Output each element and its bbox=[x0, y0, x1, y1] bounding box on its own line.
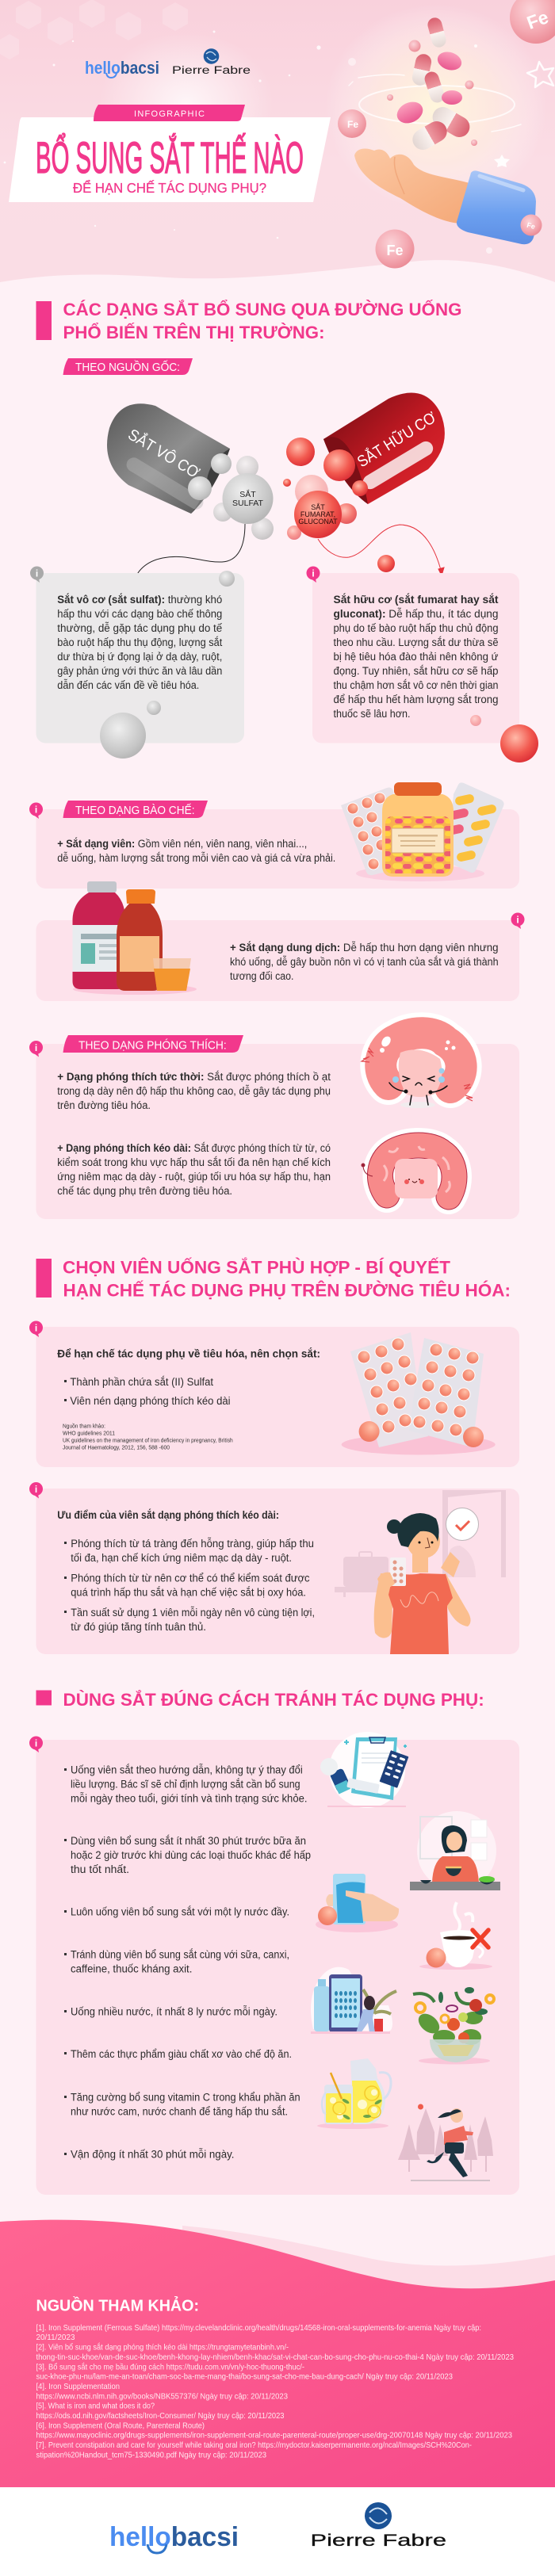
magenta bottle bbox=[73, 881, 125, 989]
logo: hellobacsi (header): hellobacsi bbox=[85, 58, 159, 78]
panel: dạng dung dịch: tương đối cao. bbox=[230, 970, 293, 982]
section heading: oral iron forms: PHỔ BIẾN TRÊN THỊ TRƯỜNG: bbox=[63, 323, 325, 342]
reference list: [3]. Bổ sung sắt cho mẹ bầu đúng cách https://tudu.com.vn/vn/y-hoc-thuong-thuc/- bbox=[36, 2362, 304, 2372]
panel: dạng viên: dễ uống, hàm lượng sắt trong mỗi viên cao và giá cả vừa phải. bbox=[57, 852, 335, 864]
ball: sắt fumarat, gluconat: GLUCONAT bbox=[298, 518, 338, 526]
icon: grey info bbox=[30, 566, 44, 583]
section heading: oral iron forms: CÁC DẠNG SẮT BỔ SUNG QUA ĐƯỜNG UỐNG bbox=[63, 299, 461, 319]
tag: theo nguồn gốc: THEO NGUỒN GỐC: bbox=[75, 360, 180, 374]
section heading: oral iron forms bbox=[36, 299, 461, 342]
section heading: choose pill bbox=[36, 1257, 511, 1300]
source note bbox=[63, 1422, 233, 1450]
tip 4: caffeine, thuốc kháng axit. bbox=[71, 1963, 192, 1975]
panel: benefits of prolonged release: tối đa, hạn chế kích ứng niêm mạc dạ dày - ruột. bbox=[71, 1552, 292, 1564]
panel: inorganic iron bbox=[36, 571, 244, 759]
capsule: inorganic iron: SẮT VÔ CƠ bbox=[124, 425, 203, 482]
panel: dạng phóng thích: ứng niêm mạc dạ dày - ruột, giúp tối ưu hóa sự hấp thu, hạn bbox=[57, 1171, 331, 1183]
reference list: stipation%20Handout_tcm75-1330490.pdf Ngày truy cập: 20/11/2023 bbox=[36, 2451, 266, 2460]
section heading: correct use: DÙNG SẮT ĐÚNG CÁCH TRÁNH TÁC DỤNG PHỤ: bbox=[63, 1690, 484, 1710]
panel: dạng phóng thích: kiểm soát trong khu vực hấp thu sắt tối đa nên hạn chế kích bbox=[57, 1156, 331, 1168]
panel: recommendation: Thành phần chứa sắt (II) Sulfat bbox=[70, 1376, 213, 1388]
jar bbox=[382, 782, 454, 877]
reference list: suc-khoe-phu-nu/lam-me-an-toan/cham-soc-ba-me-mang-thai/bo-sung-sat-cho-me-bau-dung-cach/ Ngày truy cập: 20/11/2023 bbox=[36, 2372, 453, 2381]
footer: references wave bbox=[0, 2220, 555, 2487]
panel: dạng phóng thích: chế tác dụng phụ trên đường tiêu hóa. bbox=[57, 1185, 232, 1197]
panel: dạng dung dịch: khó uống, dễ gây buồn nôn vì có vị tanh của sắt và giá thành bbox=[230, 956, 499, 968]
panel: organic iron bbox=[312, 573, 538, 762]
panel: benefits of prolonged release: Ưu điểm của viên sắt dạng phóng thích kéo dài: bbox=[57, 1509, 279, 1521]
Fe balls: Fe bbox=[526, 221, 536, 231]
panel: inorganic iron: dư thừa bị ứ đọng lại ở dạ dày, ruột, bbox=[57, 651, 222, 663]
panel: benefits of prolonged release bbox=[36, 1489, 519, 1654]
ball: sắt fumarat, gluconat: FUMARAT, bbox=[300, 510, 335, 518]
section heading: choose pill: CHỌN VIÊN UỐNG SẮT PHÙ HỢP - BÍ QUYẾT bbox=[63, 1257, 451, 1278]
capsule pills bbox=[409, 16, 473, 154]
panel: dạng phóng thích: + Dạng phóng thích kéo dài: Sắt được phóng thích từ từ, có bbox=[57, 1142, 331, 1154]
hero illustration: hand with pills bbox=[338, 0, 555, 268]
ball: sắt sulfat bbox=[222, 473, 273, 524]
icon: info: i bbox=[35, 1042, 37, 1053]
illustration: clipboard and medicine bbox=[320, 1732, 408, 1808]
sleeve bbox=[457, 170, 536, 244]
tip 1: Uống viên sắt theo hướng dẫn, không tự ý thay đổi bbox=[71, 1764, 303, 1775]
tip 4: Tránh dùng viên bổ sung sắt cùng với sữa, canxi, bbox=[71, 1948, 289, 1961]
tip 7: như nước cam, nước chanh để tăng hấp thu sắt. bbox=[71, 2105, 288, 2118]
panel: inorganic iron: bào ruột hấp thu thụ động, lượng sắt bbox=[57, 636, 223, 648]
illustration: lemonade bbox=[317, 2058, 391, 2129]
panel: benefits of prolonged release: Tần suất sử dụng 1 viên mỗi ngày nên vô cùng tiện lợi, bbox=[71, 1607, 315, 1619]
Fe balls: Fe bbox=[524, 6, 551, 33]
reference list: [6]. Iron Supplement (Oral Route, Parenteral Route) bbox=[36, 2421, 205, 2430]
tip 1: liều lượng. Bác sĩ sẽ chỉ định lượng sắt cần bổ sung bbox=[71, 1779, 300, 1790]
tip 4 bbox=[64, 1948, 289, 1975]
blister left bbox=[341, 788, 404, 875]
reference list: [4]. Iron Supplementation bbox=[36, 2382, 120, 2391]
panel: organic iron: gluconat): Dễ hấp thu, ít tác dụng bbox=[333, 608, 498, 620]
tip 2 bbox=[64, 1835, 311, 1875]
arms bbox=[374, 1573, 393, 1638]
reference list bbox=[36, 2323, 514, 2460]
icon: grey info: i bbox=[36, 568, 38, 579]
panel: dạng phóng thích: + Dạng phóng thích tức thời: Sắt được phóng thích ồ ạt bbox=[57, 1071, 331, 1083]
icon: info: i bbox=[35, 1737, 37, 1749]
hero background bbox=[0, 0, 555, 293]
tip 8: Vận động ít nhất 30 phút mỗi ngày. bbox=[71, 2148, 235, 2161]
panel: organic iron: để hấp thu hết hàm lượng sắt trong bbox=[333, 694, 498, 705]
icon: info bbox=[29, 1482, 43, 1498]
small balls bbox=[387, 40, 477, 146]
hand bbox=[354, 149, 473, 224]
speech bubble check bbox=[446, 1508, 479, 1541]
panel: usage tips bbox=[36, 1740, 519, 2195]
tip 2: thu tốt nhất. bbox=[71, 1863, 129, 1875]
panel: benefits of prolonged release: từ đó giúp tăng tính tuân thủ. bbox=[71, 1621, 206, 1633]
panel: organic iron: đọng. Tuy nhiên, sắt hữu cơ sẽ hấp bbox=[333, 665, 498, 677]
orbit ring bbox=[349, 75, 521, 132]
icon: info bbox=[29, 1736, 43, 1752]
blister in hand bbox=[377, 1557, 406, 1588]
section heading: choose pill: HẠN CHẾ TÁC DỤNG PHỤ TRÊN ĐƯỜNG TIÊU HÓA: bbox=[63, 1281, 511, 1300]
icon: info bbox=[511, 913, 525, 929]
arrow: fumarat to pink panel bbox=[318, 525, 444, 575]
icon: pink info bbox=[306, 566, 320, 583]
tag: infographic: INFOGRAPHIC bbox=[134, 109, 205, 119]
icon: info: i bbox=[516, 915, 519, 926]
reference list: [2]. Viên bổ sung sắt dạng phóng thích kéo dài https://trungtamytetanbinh.vn/- bbox=[36, 2341, 289, 2352]
tip 3: Luôn uống viên bổ sung sắt với một ly nước đầy. bbox=[71, 1905, 289, 1918]
reference list: 20/11/2023 bbox=[36, 2333, 75, 2342]
illustration: phone and water drops bbox=[311, 1967, 396, 2034]
panel: dạng dung dịch bbox=[36, 920, 519, 1001]
panel: organic iron: bị hệ tiêu hóa đào thải nên không ứ bbox=[333, 651, 498, 663]
red iron balls bbox=[283, 438, 395, 572]
icon: pink info: i bbox=[312, 568, 315, 579]
panel: inorganic iron: Sắt vô cơ (sắt sulfat): thường khó bbox=[57, 594, 222, 606]
arrow: sulfat to grey panel bbox=[131, 524, 245, 585]
logo: Pierre Fabre (header) bbox=[172, 48, 251, 76]
tip 1 bbox=[64, 1764, 308, 1804]
tip 6: Thêm các thực phẩm giàu chất xơ vào chế độ ăn. bbox=[71, 2048, 292, 2060]
illustration: happy intestine bbox=[362, 1145, 454, 1198]
illustration: runner bbox=[398, 2104, 493, 2180]
panel: organic iron: theo nhu cầu. Lượng sắt dư thừa sẽ bbox=[333, 636, 498, 648]
panel: inorganic iron: hấp thu với các dạng bào chế thông bbox=[57, 608, 222, 620]
tip 5: Uống nhiều nước, ít nhất 8 ly nước mỗi ngày. bbox=[71, 2005, 278, 2018]
panel: organic iron: Sắt hữu cơ (sắt fumarat hay sắt bbox=[333, 594, 499, 606]
reference list: [1]. Iron Supplement (Ferrous Sulfate) https://my.clevelandclinic.org/health/drugs/14568-iron-oral-supplements-for-anemia Ngày truy cập: bbox=[36, 2323, 481, 2333]
illustration: coffee forbidden bbox=[419, 1902, 492, 1970]
tip 7 bbox=[64, 2091, 300, 2118]
reference list: https://www.ncbi.nlm.nih.gov/books/NBK557376/ Ngày truy cập: 20/11/2023 bbox=[36, 2392, 288, 2402]
panel: benefits of prolonged release: Phóng thích từ từ nên cơ thể có thể kiểm soát được bbox=[71, 1573, 310, 1584]
illustration: pill jar and blisters bbox=[341, 782, 504, 881]
illustration: tablet blisters bbox=[342, 1332, 496, 1455]
tag: infographic bbox=[94, 105, 245, 121]
panel: organic iron: phụ do tế bào ruột hấp thu chủ động bbox=[333, 622, 498, 634]
panel: inorganic iron: thường, dễ gặp tác dụng phụ do tế bbox=[57, 622, 223, 634]
ball: sắt fumarat, gluconat: SẮT bbox=[311, 503, 325, 511]
tip 2: hoặc 2 giờ trước khi dùng các loại thuốc khác để hấp bbox=[71, 1849, 311, 1861]
illustration: woman taking pill bbox=[335, 1490, 506, 1654]
blister right bbox=[444, 782, 504, 873]
Fe balls: Fe bbox=[386, 243, 404, 258]
panel: inorganic iron: gây phản ứng với thức ăn và lâu dần bbox=[57, 665, 222, 677]
icon: info: i bbox=[35, 1322, 37, 1333]
panel: recommendation bbox=[36, 1327, 519, 1467]
panel: dạng viên: + Sắt dạng viên: Gồm viên nén, viên nang, viên nhai..., bbox=[57, 838, 307, 850]
reference list: https://ods.od.nih.gov/factsheets/Iron-Consumer/ Ngày truy cập: 20/11/2023 bbox=[36, 2411, 285, 2421]
icon: info bbox=[29, 802, 43, 819]
logo: Pierre Fabre (header): Pierre Fabre bbox=[172, 64, 251, 76]
reference list: [7]. Prevent constipation and care for yourself while taking oral iron? https://mydoctor.kaiserpermanente.org/ncal/Images/SCH%20Con- bbox=[36, 2440, 472, 2450]
faded mirror and medical kit bbox=[335, 1490, 506, 1597]
source note: UK guidelines on the management of iron deficiency in pregnancy, British bbox=[63, 1436, 233, 1444]
capsule: organic iron bbox=[323, 393, 445, 504]
stars bbox=[494, 62, 553, 167]
tag: theo dạng bào chế bbox=[63, 801, 208, 818]
capsule: organic iron: SẮT HỮU CƠ bbox=[354, 407, 439, 471]
ball: sắt sulfat: SẮT bbox=[239, 489, 256, 499]
wave under hero bbox=[0, 260, 555, 317]
icon: info: i bbox=[35, 804, 37, 815]
illustration: salad bowl bbox=[413, 1987, 494, 2064]
face and hair bbox=[412, 1554, 428, 1573]
panel: dạng phóng thích: trong dạ dày nên độ hấp thu không cao, dễ gây tác dụng phụ bbox=[57, 1085, 331, 1097]
ball: sắt fumarat, gluconat bbox=[294, 491, 342, 538]
panel: organic iron: thuốc sẽ lâu hơn. bbox=[333, 708, 411, 720]
orange-red bottle bbox=[117, 889, 163, 991]
icon: info: i bbox=[35, 1484, 37, 1495]
measuring cup bbox=[153, 958, 191, 991]
illustration: woman eating bbox=[410, 1811, 500, 1890]
logo: hellobacsi (footer): hellobacsi bbox=[109, 2522, 239, 2552]
panel: inorganic iron: dẫn đến các vấn đề về tiêu hóa. bbox=[57, 679, 199, 691]
tag: theo dạng phóng thích bbox=[63, 1035, 243, 1053]
panel: organic iron: thu chậm hơn sắt vô cơ nên thời gian bbox=[333, 679, 498, 691]
tip 2: Dùng viên bổ sung sắt ít nhất 30 phút trước bữa ăn bbox=[71, 1835, 306, 1847]
source note: Nguồn tham khảo: bbox=[63, 1422, 105, 1430]
references title: NGUỒN THAM KHẢO: bbox=[36, 2295, 199, 2314]
reference list: https://www.mayoclinic.org/drugs-supplements/iron-supplement-oral-route-parenteral-route/proper-use/drg-20070148 Ngày truy cập: 20/11/2023 bbox=[36, 2430, 512, 2440]
subtitle: ĐỂ HẠN CHẾ TÁC DỤNG PHỤ? bbox=[73, 179, 266, 196]
main title: BỔ SUNG SẮT THẾ NÀO bbox=[36, 132, 304, 182]
panel: benefits of prolonged release: Phóng thích từ tá tràng đến hỗng tràng, giúp hấp thu bbox=[71, 1538, 314, 1550]
panel: recommendation: Để hạn chế tác dụng phụ về tiêu hóa, nên chọn sắt: bbox=[57, 1347, 320, 1360]
ball: sắt sulfat: SULFAT bbox=[232, 499, 264, 508]
illustration: sad intestine bbox=[362, 1033, 473, 1108]
reference list: thong-tin-suc-khoe/van-de-suc-khoe/benh-khong-lay-nhiem/benh-khac/sat-vi-chat-can-bo-sung-cho-phu-nu-co-thai-4 Ngày truy cập: 20/11/2023 bbox=[36, 2352, 514, 2362]
panel: benefits of prolonged release: quá trình hấp thu sắt và hạn chế việc sắt bị oxy hóa. bbox=[71, 1587, 306, 1598]
tag: theo nguồn gốc bbox=[63, 358, 193, 375]
panel: dạng viên bbox=[36, 809, 519, 889]
reference list: [5]. What is iron and what does it do? bbox=[36, 2402, 155, 2411]
illustration: glass of water bbox=[316, 1874, 399, 1932]
icon: info bbox=[29, 1320, 43, 1337]
panel: dạng dung dịch: + Sắt dạng dung dịch: Dễ hấp thu hơn dạng viên nhưng bbox=[230, 942, 499, 954]
source note: WHO guidelines 2011 bbox=[63, 1430, 115, 1436]
grey iron balls bbox=[188, 453, 274, 540]
source note: Journal of Haematology, 2012, 156, 588 -600 bbox=[63, 1444, 170, 1450]
shirt bbox=[388, 1573, 453, 1654]
panel: recommendation: Viên nén dạng phóng thích kéo dài bbox=[70, 1395, 231, 1407]
panel: dạng phóng thích: trên đường tiêu hóa. bbox=[57, 1099, 151, 1111]
logo: Pierre Fabre (footer) bbox=[311, 2502, 446, 2550]
tablets bbox=[393, 49, 464, 128]
logo: Pierre Fabre (footer): Pierre Fabre bbox=[311, 2532, 446, 2550]
Fe balls bbox=[338, 0, 555, 268]
capsule: inorganic iron bbox=[107, 403, 230, 514]
tag: theo dạng phóng thích: THEO DẠNG PHÓNG THÍCH: bbox=[78, 1038, 227, 1053]
tag: theo dạng bào chế: THEO DẠNG BÀO CHẾ: bbox=[75, 804, 195, 817]
icon: info bbox=[29, 1041, 43, 1057]
illustration: syrup bottles bbox=[73, 881, 197, 995]
tip 1: mỗi ngày theo tuổi, giới tính và tình trạng sức khỏe. bbox=[71, 1793, 308, 1804]
Fe balls: Fe bbox=[347, 119, 358, 130]
title banner bbox=[9, 105, 331, 202]
footer white band bbox=[0, 2487, 555, 2576]
panel: dạng phóng thích bbox=[36, 1044, 519, 1219]
tip 7: Tăng cường bổ sung vitamin C trong khẩu phần ăn bbox=[71, 2091, 300, 2104]
